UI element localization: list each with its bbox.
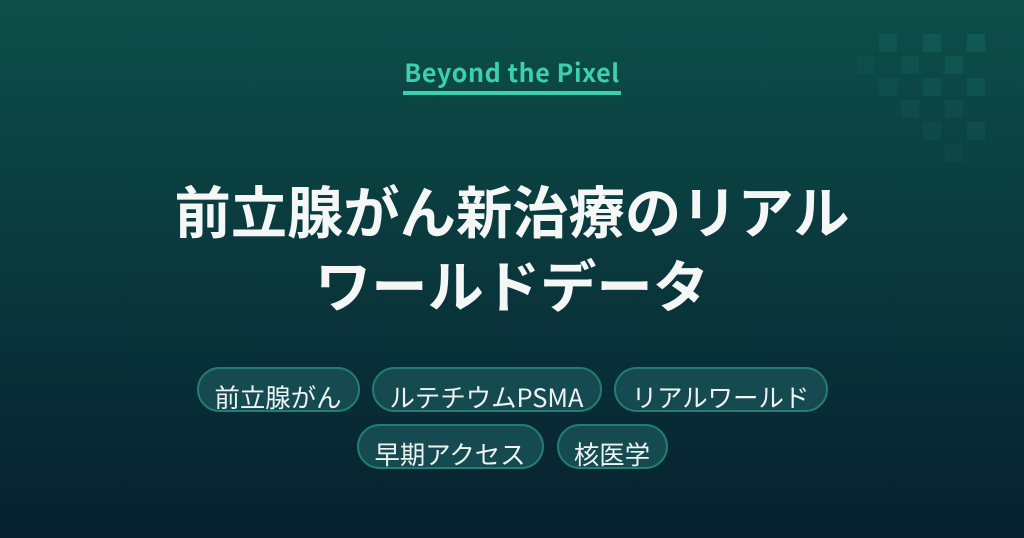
title: 前立腺がん新治療のリアル bbox=[174, 169, 850, 250]
tag: 早期アクセス: 早期アクセス bbox=[374, 436, 526, 472]
tag: リアルワールド bbox=[614, 367, 828, 412]
tags bbox=[197, 367, 828, 472]
tag: ルテチウムPSMA: ルテチウムPSMA bbox=[390, 379, 583, 415]
tag: 核医学 bbox=[557, 424, 668, 469]
tag: 前立腺がん: 前立腺がん bbox=[215, 379, 341, 415]
tag: 核医学: 核医学 bbox=[574, 436, 650, 472]
decorative pattern: squares bbox=[879, 34, 985, 140]
brand label: Beyond the Pixel: Beyond the Pixel bbox=[404, 54, 620, 90]
tag: リアルワールド: リアルワールド bbox=[632, 379, 809, 415]
tag: ルテチウムPSMA bbox=[372, 367, 602, 412]
tag: 前立腺がん bbox=[197, 367, 360, 412]
tag: 早期アクセス bbox=[357, 424, 544, 469]
title: ワールドデータ bbox=[315, 243, 709, 324]
title bbox=[174, 169, 850, 324]
